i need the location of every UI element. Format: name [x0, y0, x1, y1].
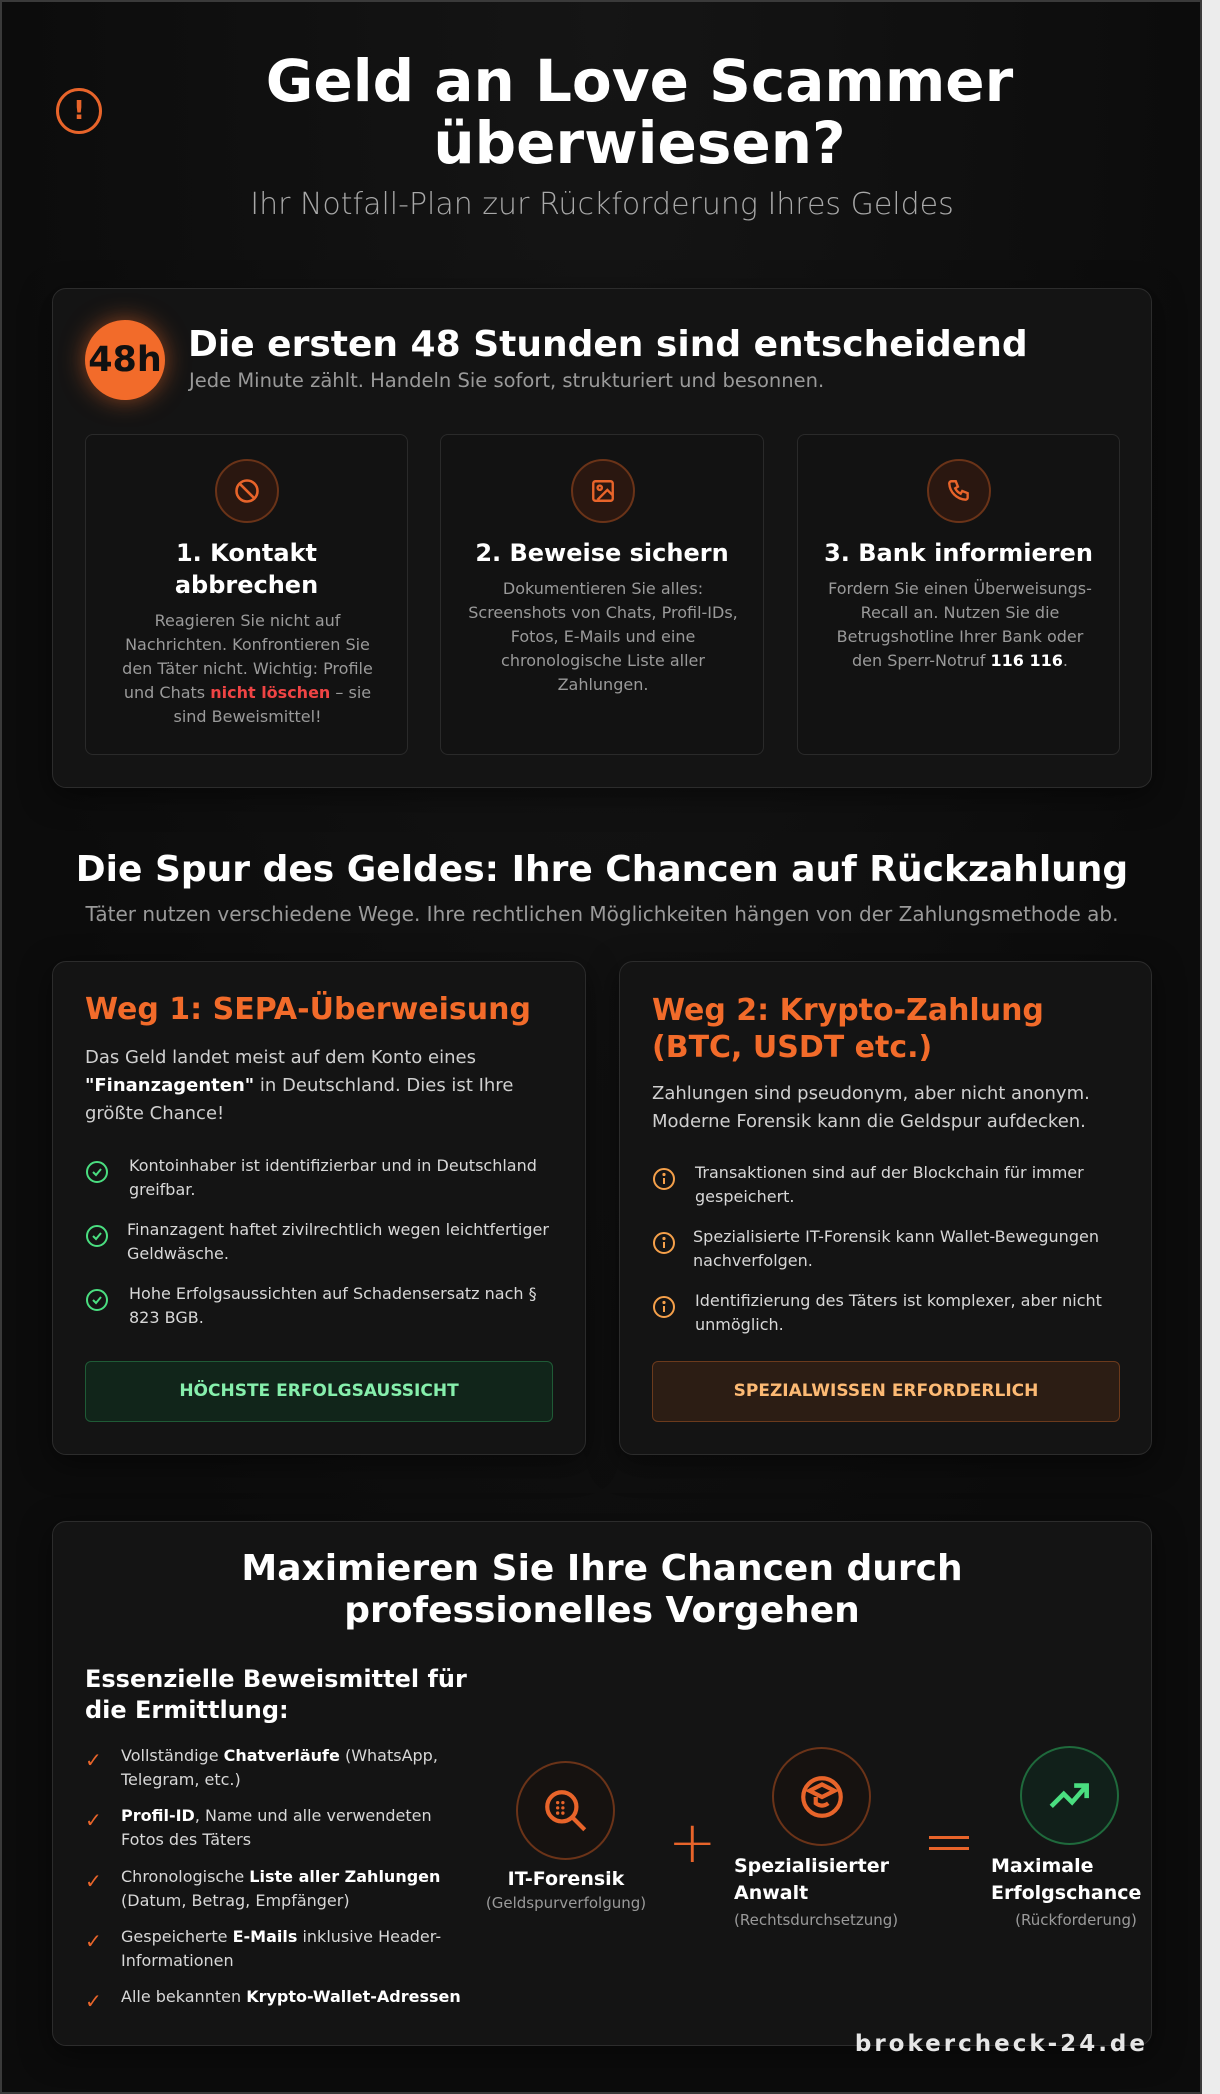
label: success: (Rückforderung): [1015, 1911, 1137, 1929]
item 3: Hohe Erfolgsaussichten auf Schadensersatz nach § 823 BGB.: [129, 1284, 537, 1327]
icon: image: [571, 459, 635, 523]
list: evidence: [85, 1746, 461, 2013]
label: lawyer: Spezialisierter: [734, 1855, 889, 1877]
title: überwiesen?: [433, 109, 846, 177]
card title: 1. Kontakt: [176, 539, 317, 567]
badge: highest chance: HÖCHSTE ERFOLGSAUSSICHT: [179, 1381, 459, 1401]
plus: +: [668, 1808, 717, 1876]
heading: professionelles Vorgehen: [344, 1590, 860, 1631]
label: success: [991, 1855, 1141, 1929]
footer: brand: brokercheck-24.de: [855, 2031, 1148, 2057]
card title: 3. Bank informieren: [824, 539, 1093, 567]
heading: Maximieren Sie Ihre Chancen durch: [241, 1548, 963, 1589]
title: [266, 47, 1014, 177]
icon: warning: !: [73, 96, 85, 126]
card text: Dokumentieren Sie alles: Screenshots von Chats, Profil-IDs, Fotos, E-Mails und eine chronologische Liste aller Zahlungen.: [468, 579, 738, 694]
item 2: Finanzagent haftet zivilrechtlich wegen leichtfertiger Geldwäsche.: [127, 1220, 549, 1263]
item 1: ✓: [85, 1748, 102, 1772]
heading: [241, 1548, 963, 1631]
card: step 2: [440, 434, 764, 755]
card title: 2. Beweise sichern: [475, 539, 729, 567]
label: lawyer: Anwalt: [734, 1882, 808, 1904]
label: IT forensics: (Geldspurverfolgung): [486, 1894, 646, 1912]
item 1: Transaktionen sind auf der Blockchain für immer gespeichert.: [695, 1163, 1084, 1206]
item 3: ✓: [85, 1869, 102, 1893]
title: Geld an Love Scammer: [266, 47, 1013, 115]
icon: lawyer: [772, 1747, 871, 1846]
item 2: Profil-ID, Name und alle verwendeten Fotos des Täters: [121, 1806, 432, 1849]
item 3: Chronologische Liste aller Zahlungen (Datum, Betrag, Empfänger): [121, 1867, 440, 1910]
card title: [652, 993, 1044, 1065]
section heading: money trail: Die Spur des Geldes: Ihre Chancen auf Rückzahlung: [76, 849, 1128, 890]
icon: no chat: [215, 459, 279, 523]
card title: (BTC, USDT etc.): [652, 1030, 932, 1065]
list: SEPA benefits: [86, 1156, 549, 1327]
card text: Fordern Sie einen Überweisungs-Recall an. Nutzen Sie die Betrugshotline Ihrer Bank oder den Sperr-Notruf 116 116.: [828, 579, 1092, 670]
panel: maximize chances: [52, 1521, 1152, 2046]
icon: IT forensics: [516, 1761, 615, 1860]
item 4: ✓: [85, 1929, 102, 1953]
item 2: Spezialisierte IT-Forensik kann Wallet-Bewegungen nachverfolgen.: [693, 1227, 1099, 1270]
section subheading: Täter nutzen verschiedene Wege. Ihre rechtlichen Möglichkeiten hängen von der Zahlungsmethode ab.: [86, 902, 1118, 926]
card: step 3: [797, 434, 1120, 755]
icon: phone: [927, 459, 991, 523]
badge: expertise needed: SPEZIALWISSEN ERFORDERLICH: [734, 1381, 1038, 1401]
subheading: evidence: [85, 1665, 467, 1724]
card title: abbrechen: [175, 571, 318, 599]
label: IT forensics: [486, 1868, 646, 1912]
item 3: Identifizierung des Täters ist komplexer, aber nicht unmöglich.: [695, 1291, 1102, 1334]
heading: Die ersten 48 Stunden sind entscheidend: [188, 324, 1028, 365]
equals: [929, 1836, 969, 1850]
card text: Reagieren Sie nicht auf Nachrichten. Konfrontieren Sie den Täter nicht. Wichtig: Profile und Chats nicht löschen – sie sind Beweismittel!: [122, 611, 373, 726]
label: IT forensics: IT-Forensik: [508, 1868, 624, 1890]
icon: success: [1020, 1746, 1119, 1845]
list: crypto facts: [653, 1163, 1102, 1334]
label: lawyer: [734, 1855, 898, 1929]
item 2: ✓: [85, 1808, 102, 1832]
label: success: Erfolgschance: [991, 1882, 1141, 1904]
label: success: Maximale: [991, 1855, 1094, 1877]
item 1: Vollständige Chatverläufe (WhatsApp, Telegram, etc.): [121, 1746, 438, 1789]
label: lawyer: (Rechtsdurchsetzung): [734, 1911, 898, 1929]
subheading: Jede Minute zählt. Handeln Sie sofort, strukturiert und besonnen.: [189, 369, 824, 392]
item 5: [85, 1987, 461, 2013]
card title: Weg 1: SEPA-Überweisung: [85, 992, 531, 1027]
item 1: Kontoinhaber ist identifizierbar und in Deutschland greifbar.: [129, 1156, 537, 1199]
subheading: evidence: Essenzielle Beweismittel für: [85, 1665, 467, 1693]
badge: 48h: 48h: [88, 340, 162, 380]
card text: Das Geld landet meist auf dem Konto eines "Finanzagenten" in Deutschland. Dies ist Ihre größte Chance!: [85, 1047, 513, 1124]
card text: Zahlungen sind pseudonym, aber nicht anonym. Moderne Forensik kann die Geldspur aufdecken.: [652, 1083, 1090, 1132]
badge: expertise needed: [652, 1361, 1120, 1422]
item 5: ✓: [85, 1989, 102, 2013]
panel: crypto: [619, 961, 1152, 1455]
card title: Weg 2: Krypto-Zahlung: [652, 993, 1044, 1028]
item 4: Gespeicherte E-Mails inklusive Header-Informationen: [121, 1927, 441, 1970]
item 5: Alle bekannten Krypto-Wallet-Adressen: [121, 1987, 461, 2006]
panel: 48 hours: [52, 288, 1152, 788]
subheading: evidence: die Ermittlung:: [85, 1696, 289, 1724]
badge: highest chance: [85, 1361, 553, 1422]
panel: SEPA: [52, 961, 586, 1455]
badge: 48h: [85, 320, 165, 400]
card title: [175, 539, 318, 599]
icon: warning: [56, 88, 102, 134]
subtitle: Ihr Notfall-Plan zur Rückforderung Ihres Geldes: [250, 187, 954, 222]
card: step 1: [85, 434, 408, 755]
